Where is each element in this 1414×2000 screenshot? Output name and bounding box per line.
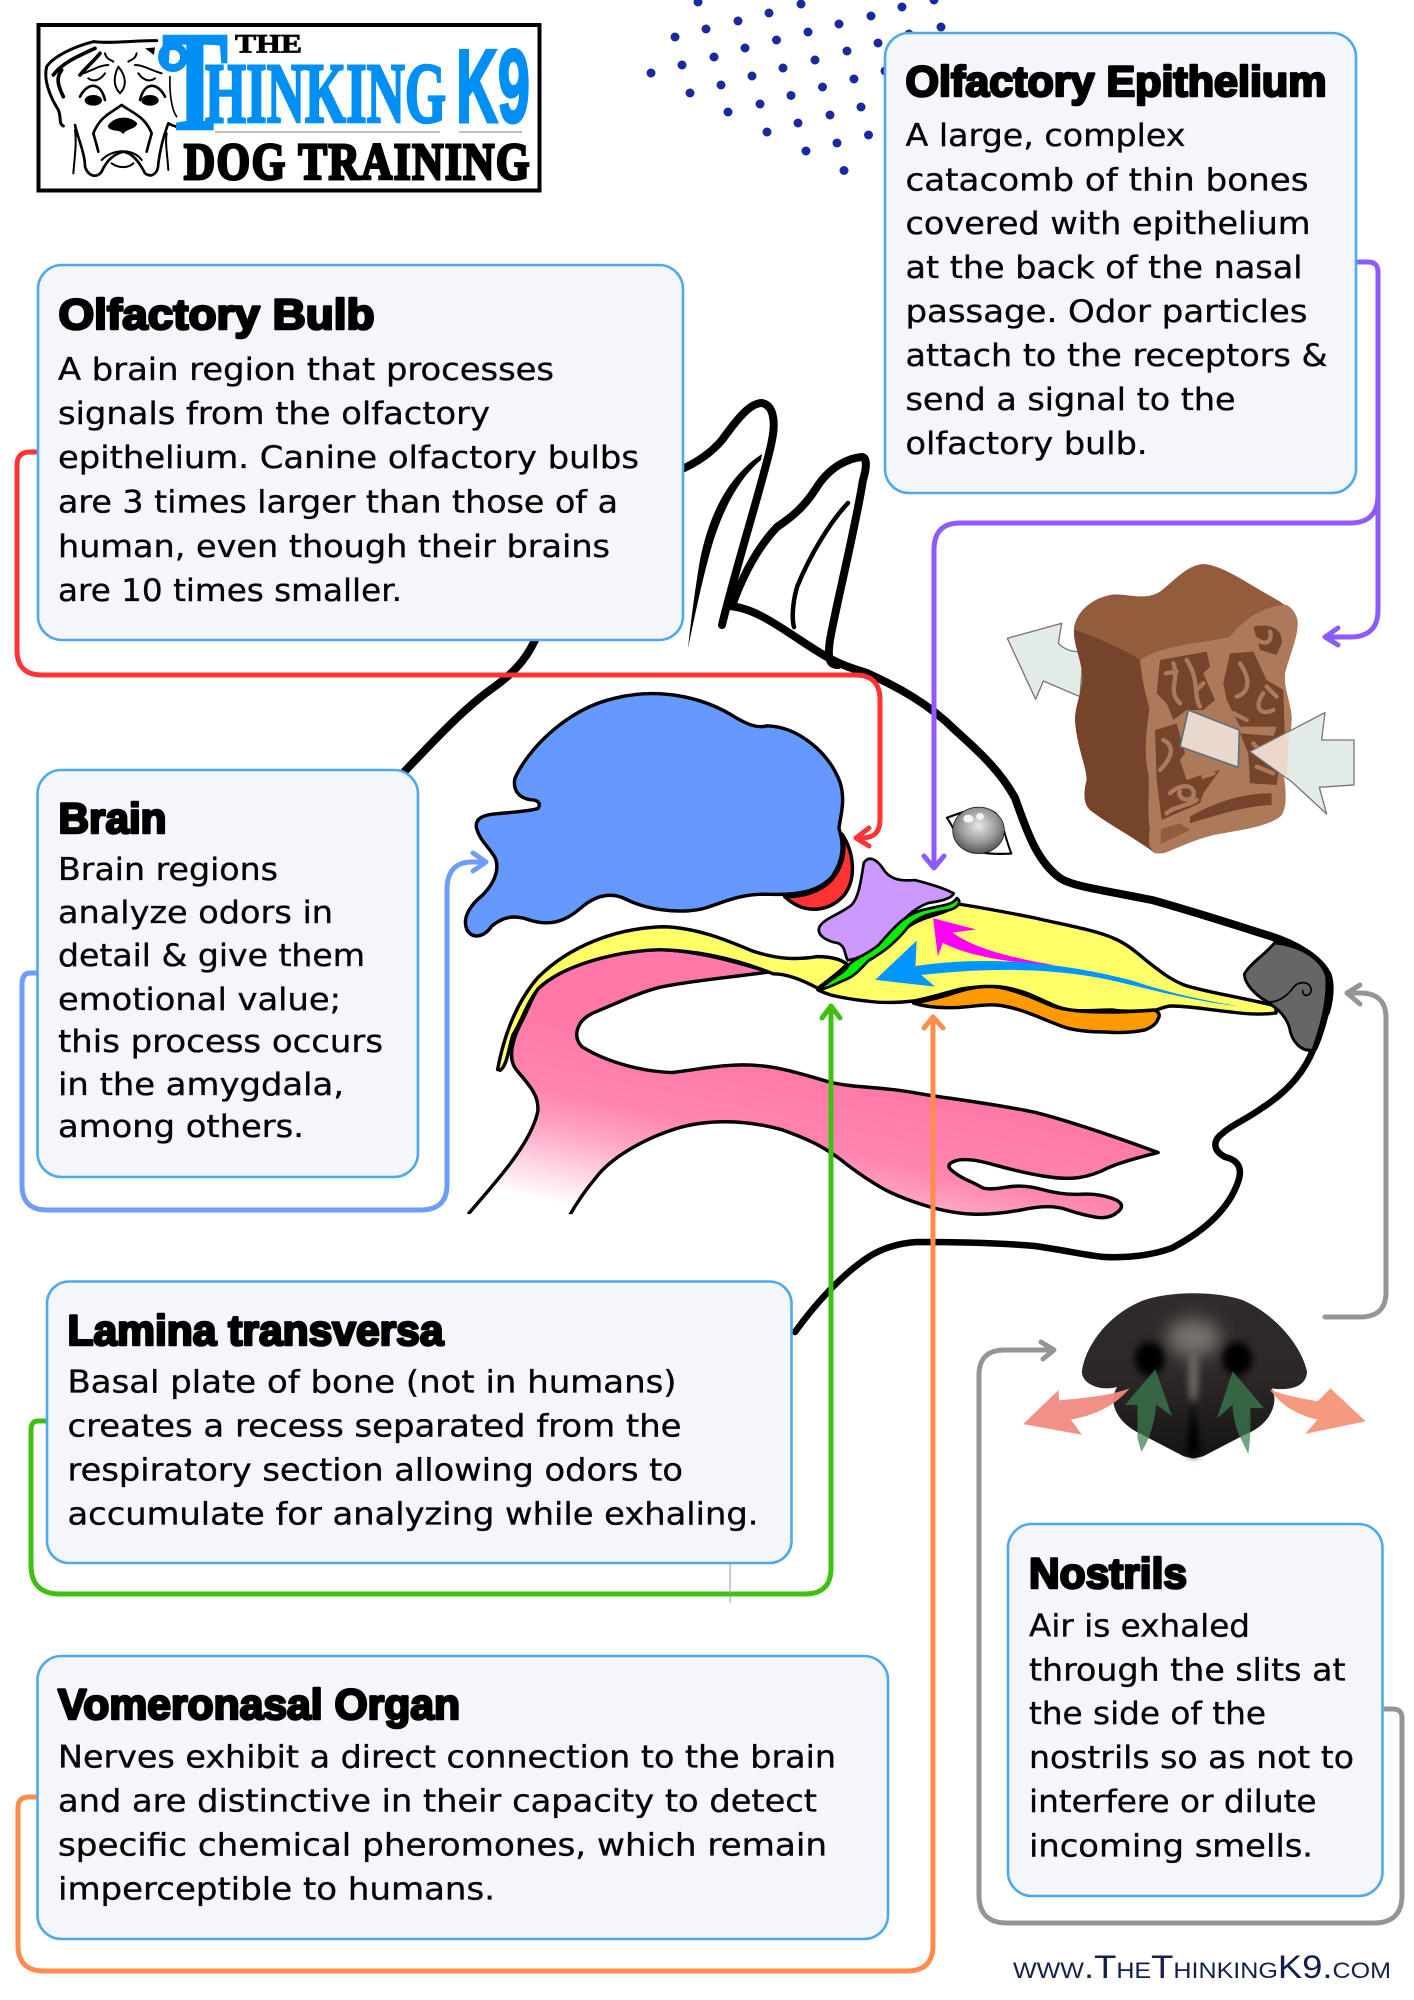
text: nostrils description: the side of the: [1029, 1696, 1266, 1732]
translucent cross-section window: [1180, 710, 1239, 767]
airflow arrows, nose and eye: [875, 807, 1327, 1050]
connector: olfactory epithelium to turbinates and nasal cavity (purple): [924, 262, 1378, 868]
heading: nostrils: Nostrils: [1029, 1550, 1187, 1598]
heading: olfactory epithelium: Olfactory Epithelium: [906, 58, 1326, 106]
connector: nose photo to dog nose (grey): [1325, 985, 1386, 1317]
text: olfactory epithelium description: passage. Odor particles: [906, 294, 1308, 330]
decorative underline in logo: [215, 131, 522, 133]
text: vomeronasal organ description: and are distinctive in their capacity to detect: [58, 1784, 817, 1820]
text: nostrils description: nostrils so as not to: [1029, 1740, 1354, 1776]
connector: vomeronasal organ (orange): [18, 1017, 943, 1971]
brain (blue): [465, 694, 843, 936]
turbinate block illustration with airflow arrows: [1007, 564, 1354, 853]
heading: lamina transversa: Lamina transversa: [68, 1307, 445, 1355]
text: nostrils description: interfere or dilute: [1029, 1784, 1316, 1820]
text: olfactory bulb description: A brain region that processes: [58, 352, 554, 388]
text: olfactory bulb description: epithelium. Canine olfactory bulbs: [58, 440, 639, 476]
rear yellow nasal passage: [498, 927, 847, 1070]
connector: nostrils panel to nose photo (grey): [979, 1342, 1402, 1923]
dog eye: [947, 807, 1011, 854]
arrow: air entering the block: [1250, 713, 1354, 814]
arrow: blue airflow: [875, 941, 1238, 1006]
heading: vomeronasal organ: Vomeronasal Organ: [58, 1681, 460, 1729]
dog nose in profile: [1244, 943, 1327, 1050]
text: brain description: in the amygdala,: [58, 1067, 344, 1103]
ears: [680, 403, 866, 665]
text: nostrils description: through the slits at: [1029, 1652, 1346, 1688]
logo word: THINKING K9: HINKING: [205, 45, 446, 141]
panel: olfactory epithelium: [885, 33, 1356, 493]
text: nostrils description: Air is exhaled: [1029, 1608, 1250, 1644]
hairline under the lamina panel: [729, 1563, 731, 1603]
panel: vomeronasal organ: [38, 1656, 888, 1939]
vomeronasal organ (orange): [914, 986, 1159, 1033]
nasal anatomy illustration: [465, 694, 1327, 1226]
text: nostrils description: [1029, 1608, 1354, 1864]
logo word: THINKING K9: K9: [456, 29, 530, 145]
nose photo with airflow arrows: [1023, 1293, 1366, 1458]
logo word: THINKING K9: [162, 2, 530, 160]
text: brain description: this process occurs: [58, 1024, 383, 1060]
olfactory bulb (red): [785, 834, 852, 909]
panel: lamina transversa: [47, 1282, 792, 1563]
mouth and tongue tissue: [465, 950, 1158, 1226]
panel: olfactory bulb: [38, 265, 683, 640]
text: olfactory bulb description: are 10 times smaller.: [58, 573, 402, 609]
logo: The Thinking K9 Dog Training: [38, 2, 540, 191]
connector: lamina transversa (green): [31, 1006, 840, 1594]
arrow: magenta sniff airflow: [933, 918, 1054, 965]
text: olfactory bulb description: are 3 times larger than those of a: [58, 484, 618, 520]
text: brain description: [58, 852, 383, 1145]
text: olfactory epithelium description: at the back of the nasal: [906, 250, 1302, 286]
panel: brain: [38, 770, 418, 1177]
heading: olfactory bulb: Olfactory Bulb: [58, 291, 374, 339]
text: lamina transversa description: accumulate for analyzing while exhaling.: [68, 1496, 758, 1532]
text: olfactory epithelium description: [906, 118, 1328, 462]
connector: brain (blue): [22, 853, 486, 1210]
text: olfactory bulb description: human, even though their brains: [58, 529, 610, 565]
lower muzzle and jaw: [795, 1012, 1326, 1332]
text: vomeronasal organ description: Nerves exhibit a direct connection to the brain: [58, 1740, 836, 1776]
connector: olfactory bulb (red): [17, 452, 880, 846]
lamina transversa (green): [819, 898, 959, 990]
text: brain description: detail & give them: [58, 938, 365, 974]
text: olfactory epithelium description: olfactory bulb.: [906, 426, 1148, 462]
dog head outline: [404, 403, 1330, 1332]
text: brain description: emotional value;: [58, 982, 341, 1018]
text: olfactory bulb description: [58, 352, 639, 609]
logo word: THE: THE: [235, 30, 302, 58]
arrow: left inhale: [1125, 1369, 1172, 1452]
text: olfactory epithelium description: covered with epithelium: [906, 206, 1310, 242]
top of the head and muzzle: [728, 606, 1330, 1012]
brain structures: [465, 694, 959, 990]
dog nose: [1082, 1293, 1307, 1458]
olfactory epithelium region (purple): [819, 859, 954, 960]
icon: boxer dog face: [46, 41, 182, 176]
arrow: left exhale: [1023, 1388, 1130, 1435]
arrow: right exhale: [1270, 1388, 1366, 1434]
text: vomeronasal organ description: specific chemical pheromones, which remain: [58, 1828, 827, 1864]
logo words: DOG TRAINING: DOG TRAINING: [184, 134, 531, 191]
text: olfactory epithelium description: A large, complex: [906, 118, 1186, 154]
heading: brain: Brain: [58, 795, 166, 843]
logo word: THINKING K9: T: [162, 2, 228, 160]
arrow: right inhale: [1217, 1371, 1264, 1454]
text: brain description: analyze odors in: [58, 895, 333, 931]
footer: website address: www.TheThinkingK9.com: [1013, 1949, 1391, 1985]
text: lamina transversa description: Basal plate of bone (not in humans): [68, 1364, 676, 1400]
text: olfactory epithelium description: catacomb of thin bones: [906, 162, 1308, 198]
text: lamina transversa description: [68, 1364, 758, 1532]
block internal maze pattern: [1155, 625, 1285, 844]
panel: nostrils: [1008, 1524, 1382, 1896]
block body: [1074, 564, 1298, 853]
decorative dot pattern: [646, 0, 946, 175]
text: brain description: Brain regions: [58, 852, 278, 888]
text: vomeronasal organ description: imperceptible to humans.: [58, 1872, 495, 1908]
text: olfactory epithelium description: send a signal to the: [906, 382, 1236, 418]
back of the neck: [404, 640, 535, 772]
text: olfactory epithelium description: attach to the receptors &: [906, 338, 1328, 374]
text: vomeronasal organ description: [58, 1740, 836, 1908]
text: lamina transversa description: creates a recess separated from the: [68, 1408, 682, 1444]
arrow: air leaving the block: [1007, 623, 1083, 699]
text: olfactory bulb description: signals from the olfactory: [58, 396, 490, 432]
text: brain description: among others.: [58, 1109, 304, 1145]
front yellow nasal passage: [818, 904, 1276, 1014]
text: nostrils description: incoming smells.: [1029, 1828, 1313, 1864]
text: lamina transversa description: respiratory section allowing odors to: [68, 1452, 683, 1488]
